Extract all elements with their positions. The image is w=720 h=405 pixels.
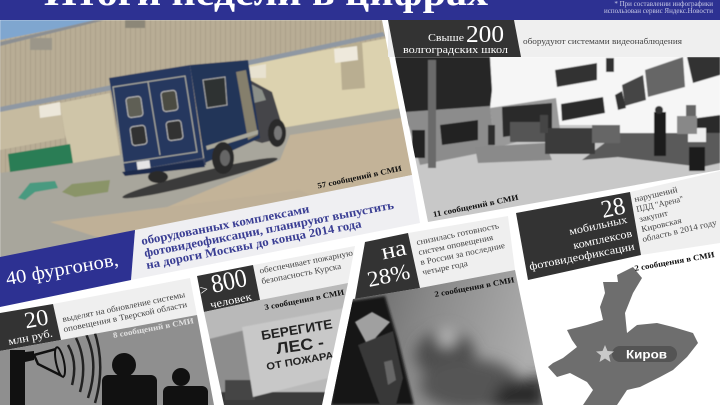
icon: building windows — [555, 57, 720, 121]
description: закупит — [638, 208, 669, 224]
panel: 28 percent — [355, 216, 515, 299]
description — [61, 289, 188, 334]
label text — [7, 304, 54, 348]
label text: 800 — [208, 263, 249, 299]
panel: emergency officer photo — [330, 270, 545, 405]
footnote: * При составлении инфографики — [614, 0, 713, 8]
icon: loudspeaker — [10, 330, 100, 405]
sign text: ОТ ПОЖАРА — [266, 350, 334, 373]
description: нарушений — [633, 184, 679, 204]
sign text: БЕРЕГИТЕ — [260, 316, 334, 343]
sign text: ЛЕС - — [275, 334, 325, 358]
caption: officer source count: 2 сообщения в СМИ — [434, 275, 516, 299]
icon: adult figure — [102, 353, 157, 405]
label text: 20 — [22, 304, 51, 333]
description — [633, 184, 718, 244]
description: снизилась готовность — [415, 220, 500, 247]
icon: air conditioners — [30, 20, 358, 118]
icon: netting — [18, 181, 58, 200]
description: на дороги Москвы до конца 2014 года — [145, 216, 363, 272]
icon: blue van — [109, 60, 286, 203]
panel: 20 million — [0, 278, 197, 351]
label text — [403, 22, 509, 56]
panel: 800 people — [197, 246, 355, 312]
header banner — [0, 0, 720, 20]
label text: на — [379, 235, 408, 264]
label text: волгоградских школ — [403, 44, 509, 56]
label text: 200 — [466, 22, 504, 48]
dark label — [355, 233, 420, 299]
label text — [199, 263, 253, 311]
label text: 28% — [365, 258, 412, 292]
panel: 40 vans text — [0, 175, 420, 307]
label text: фотовидеофиксации — [528, 241, 636, 273]
icon: star — [596, 345, 614, 362]
icon: tree — [395, 57, 493, 127]
icon: adults — [654, 105, 706, 171]
panel: forest sign photo — [204, 283, 348, 405]
icon: children group — [488, 115, 620, 154]
label text: Свыше — [428, 32, 464, 44]
panel: 28 mobile complexes — [516, 171, 720, 280]
dark label — [388, 20, 521, 57]
panel: school photo — [395, 57, 720, 227]
panel: schools header — [388, 20, 720, 57]
caption: siren source count: 8 сообщений в СМИ — [112, 316, 195, 340]
dark label — [516, 192, 641, 280]
icon: green dumpster — [8, 144, 73, 172]
footnote: использован сервис Яндекс.Новости — [604, 7, 713, 15]
description — [415, 220, 506, 277]
description: четыре года — [421, 258, 469, 277]
caption: van photo source count: 57 сообщений в СМИ — [317, 164, 403, 190]
caption: school photo source count: 11 сообщений в СМИ — [432, 193, 520, 219]
description: безопасность Курска — [260, 261, 342, 286]
map: Kirov region — [548, 267, 698, 405]
dark label — [197, 265, 260, 312]
description: систем оповещения — [417, 232, 494, 257]
label text: млн руб. — [7, 328, 54, 348]
dark label — [0, 304, 61, 351]
panel: siren illustration — [0, 315, 214, 405]
blue label — [0, 230, 135, 307]
label pill — [612, 346, 677, 362]
description: выделят на обновление системы — [61, 289, 186, 324]
sign text — [261, 319, 332, 370]
description — [258, 247, 354, 286]
shoulder patch — [355, 312, 403, 405]
description: область в 2014 году — [641, 217, 718, 244]
city name: Киров — [626, 348, 667, 362]
description: Кировская — [640, 215, 682, 234]
label text: мобильных — [568, 214, 629, 238]
description: оповещения в Тверской области — [62, 299, 188, 334]
sign board — [242, 308, 345, 397]
panel: van photo — [0, 20, 420, 270]
label text: 28 — [599, 192, 628, 224]
caption: map source count: 2 сообщения в СМИ — [634, 250, 716, 273]
description: оборудованных комплексами — [140, 202, 311, 248]
description: в России за последние — [419, 240, 506, 267]
label text: комплексов — [572, 228, 633, 252]
label text — [528, 192, 636, 273]
description: обеспечивает пожарную — [258, 247, 354, 275]
caption: forest sign source count: 3 сообщения в СМИ — [264, 288, 346, 312]
description: оборудуют системами видеонаблюдения — [523, 36, 682, 46]
label text — [365, 235, 412, 292]
label text: > — [199, 283, 210, 299]
icon: grass — [62, 180, 110, 197]
description: ПДД "Арена" — [635, 193, 684, 214]
description: фотовидеофиксации, планируют выпустить — [143, 198, 396, 260]
officer sleeve — [331, 296, 414, 405]
icon: child figure — [163, 368, 208, 405]
label text: человек — [209, 291, 253, 311]
label text: 40 фургонов, — [4, 249, 120, 290]
